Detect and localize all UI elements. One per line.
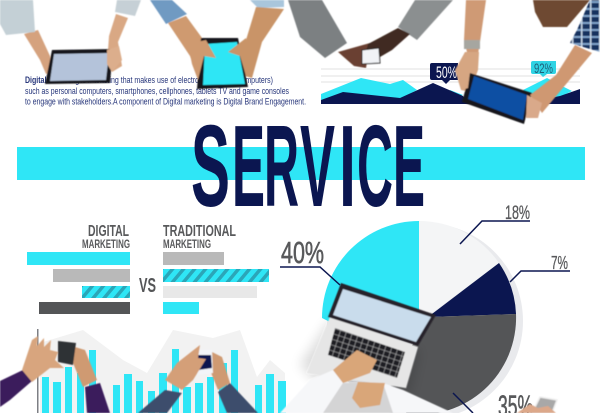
cyan title band <box>17 147 585 180</box>
callout: 92%: 92% <box>534 60 553 76</box>
label: 7% with leader line: 7% <box>551 253 568 273</box>
heading: traditional marketing <box>163 223 236 251</box>
heading: traditional marketing: TRADITIONAL <box>163 223 236 240</box>
photo: hands holding dark phone <box>0 336 110 413</box>
callout: 50% <box>430 63 458 84</box>
photo: hands holding tablet, top left <box>0 0 141 84</box>
label: 40% with leader line: 40% <box>281 235 324 270</box>
heading: digital marketing: MARKETING <box>82 237 130 251</box>
label: 18% with leader line <box>460 203 530 244</box>
bars: digital marketing <box>27 252 130 314</box>
photo: hands holding cyan tablet <box>150 0 284 89</box>
label: 18% with leader line: 18% <box>505 203 530 224</box>
title <box>191 101 425 231</box>
slice: 40% <box>322 221 419 326</box>
photo: arm with watch holding blue tablet <box>455 0 600 124</box>
slice: 18% <box>419 221 499 318</box>
label: versus: VS <box>139 275 156 297</box>
paragraph: digital marketing description: such as personal computers, smartphones, cellphones, tablets TV and game consoles <box>25 86 289 96</box>
heading: digital marketing: DIGITAL <box>88 223 129 240</box>
callout: 50%: 50% <box>436 63 457 82</box>
title: E <box>232 101 265 231</box>
paragraph: digital marketing description: Digital marketing is marketing that makes use of electronic devices (computers) <box>25 75 273 85</box>
slice: 7% <box>428 263 516 317</box>
photo: hands holding navy phone <box>138 345 258 413</box>
bar chart: bottom left <box>37 329 286 413</box>
title: I <box>339 101 356 231</box>
title: V <box>300 101 335 231</box>
title: R <box>264 101 299 231</box>
heading: digital marketing <box>82 223 130 251</box>
photo: business suits with phone <box>288 0 453 68</box>
bars: traditional marketing <box>163 252 269 314</box>
paragraph: digital marketing description <box>25 75 306 106</box>
label: 35% with leader line <box>453 390 533 413</box>
callout: 92% <box>531 60 556 77</box>
pie chart <box>322 221 523 413</box>
title: S <box>191 101 230 231</box>
title: C <box>357 101 393 231</box>
area chart with percentage callouts <box>321 60 580 104</box>
label: 7% with leader line <box>510 253 570 282</box>
label: 40% with leader line <box>280 235 340 285</box>
photo: hand with white phone, bottom right <box>517 397 557 413</box>
photo: laptop with typing hands <box>280 283 453 413</box>
slice: 35% <box>390 314 516 413</box>
infographic canvas: E <box>393 101 425 231</box>
paragraph: digital marketing description: to engage with stakeholders.A component of Digital marketing is Digital Brand Engagement. <box>25 96 306 106</box>
heading: traditional marketing: MARKETING <box>163 237 211 251</box>
